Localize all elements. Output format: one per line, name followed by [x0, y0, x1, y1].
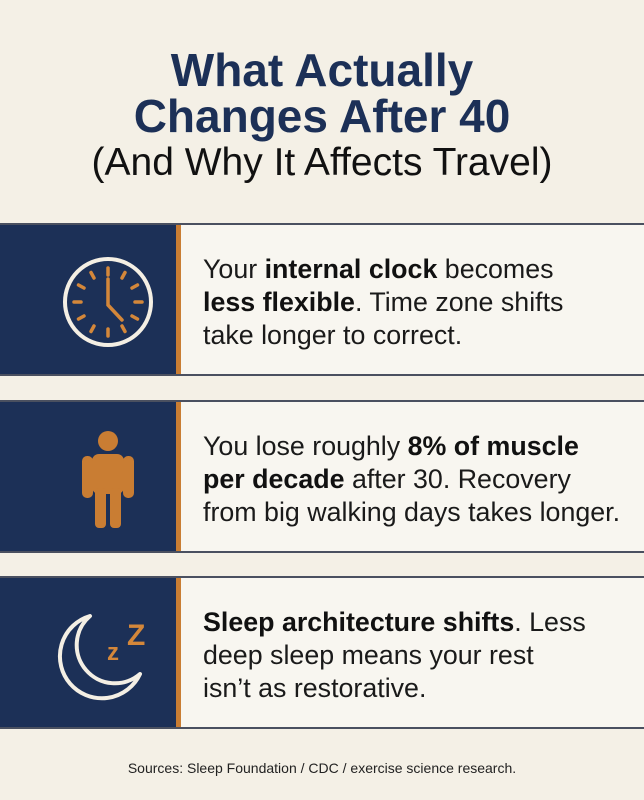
text: sleep: Sleep architecture shifts. Less [203, 607, 586, 637]
icon: clock [63, 257, 153, 347]
panel: internal clock [0, 223, 644, 376]
text: muscle [203, 431, 620, 527]
title: (And Why It Affects Travel) [92, 141, 552, 184]
panel: sleep [0, 576, 644, 729]
text: clock: Your internal clock becomes [203, 254, 554, 284]
text: sleep [203, 607, 586, 703]
text: clock: less flexible. Time zone shifts [203, 287, 563, 317]
title [92, 44, 552, 184]
panel: muscle [0, 400, 644, 553]
text: sleep: isn’t as restorative. [203, 673, 426, 703]
sources: Sources: Sleep Foundation / CDC / exercise science research. [128, 760, 516, 776]
text: muscle: You lose roughly 8% of muscle [203, 431, 579, 461]
text: muscle: from big walking days takes longer. [203, 497, 620, 527]
text: muscle: per decade after 30. Recovery [203, 464, 571, 494]
text: sleep: deep sleep means your rest [203, 640, 534, 670]
text: clock [203, 254, 563, 350]
icon: moon zzz: z [107, 639, 119, 666]
icon: moon zzz [58, 614, 145, 700]
title: What Actually [171, 44, 473, 96]
icon: moon zzz: Z [127, 619, 145, 652]
title: Changes After 40 [134, 90, 510, 142]
text: clock: take longer to correct. [203, 320, 462, 350]
icon: person [82, 431, 134, 528]
